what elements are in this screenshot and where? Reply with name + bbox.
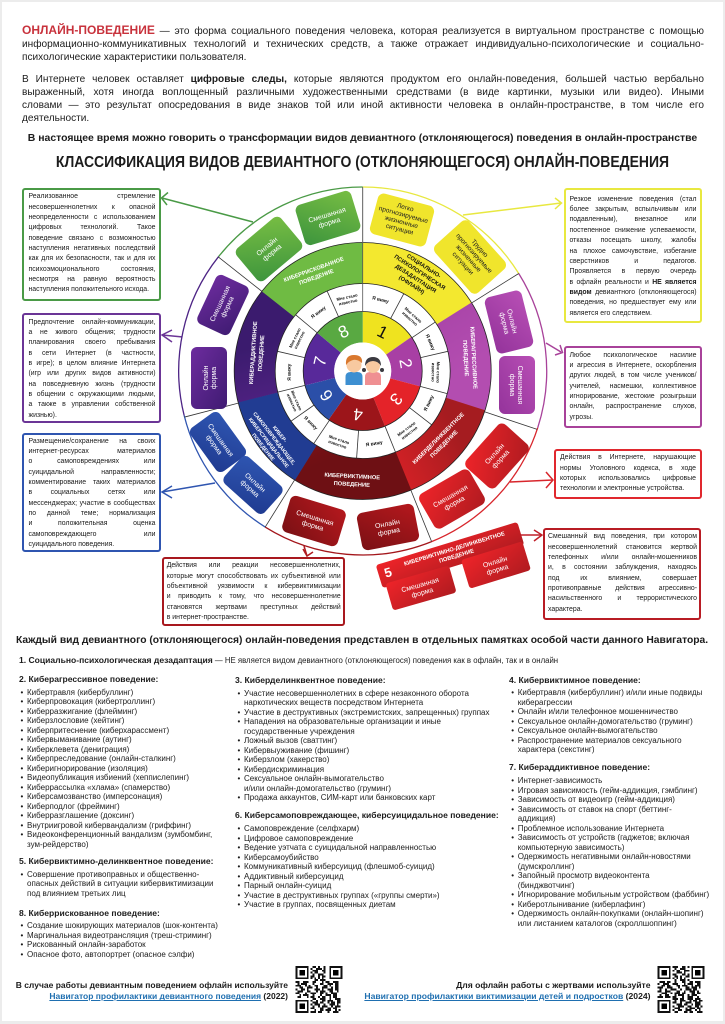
band label: sector 6: САМОПОВРЕЖДАЮЩЕЕ, [251, 411, 297, 467]
sector numbers: 4 [352, 404, 364, 424]
card: sector 8 online form: Онлайн [255, 236, 279, 258]
subtitle: В настоящее время можно говорить о трансформации видов девиантного (отклоняющегося) поведения в онлайн-пространстве [28, 133, 697, 144]
card: hard to predict situations: Трудно [470, 238, 489, 259]
inner white ring labels: известно [400, 425, 419, 441]
panel: victim-delinquent description: насильственного и террористического [548, 595, 697, 602]
panel: victim-delinquent description: характера. [548, 606, 582, 613]
inner white ring labels: Я вижу [310, 305, 328, 320]
band label: sector 1: ДЕЗАДАПТАЦИЯ [394, 264, 437, 295]
inner white ring labels: Мне стало [436, 362, 441, 383]
card: sector 5 mixed form: Смешанная [401, 577, 440, 594]
card: sector 5 mixed form: форма [411, 587, 434, 600]
list: cyber aggression: Киберрассылка «хлама» (спамерство) [27, 782, 170, 792]
list: delinquent: Кибердискриминация [244, 764, 324, 774]
list: cyber aggression: зум-рейдерство) [27, 840, 89, 848]
inner white ring labels: Мне стало [290, 390, 303, 411]
band label: sector 7: КИБЕРАДДИКТИВНОЕ [249, 321, 259, 384]
band label: sector 7: ПОВЕДЕНИЕ [258, 335, 266, 372]
list: self-harm: Участие в группах, посвященных диетам [244, 900, 396, 909]
inner white ring labels: известно [293, 330, 306, 350]
card: sector 2 online form: Онлайн [505, 308, 519, 335]
panel: socio-psychological maladjustment description: Проявляется в первую очередь [570, 268, 696, 275]
arrow: banner to mixed behaviour box [520, 530, 542, 541]
card: sector 8 mixed form: Смешанная [308, 207, 347, 225]
list: delinquent: наркотических веществ посредством Интернета [244, 698, 423, 707]
footer note: right navigator [364, 980, 650, 1001]
sector numbers [310, 321, 416, 424]
card: sector 3 online form [463, 421, 531, 491]
card: sector 8 online form [233, 214, 305, 284]
list: cyber aggression: Киберподлог (фрейминг) [27, 802, 120, 810]
intro paragraph: online behaviour definition [22, 22, 704, 62]
panel: victim-delinquent description: и, в состоянии заблуждения, находясь [548, 564, 697, 571]
panel: cyber aggression description: Любое психологическое насилие [570, 352, 696, 358]
inner white ring labels [285, 292, 441, 450]
card: easily predictable situations: жизненные [384, 215, 419, 230]
card: sector 7 online form: Онлайн [202, 365, 210, 391]
QR code: left [296, 966, 342, 1013]
list: delinquent: Киберзлом (хакерство) [244, 755, 329, 764]
band label: sector 4: КИБЕРВИКТИМНОЕ [324, 473, 380, 481]
panel: addiction description: а не живого общения; трудности [28, 329, 156, 336]
list: self-harm: Киберсамоубийство [244, 852, 319, 862]
list: addiction: Игнорирование мобильным устройством (фаббинг) [518, 890, 709, 899]
card: sector 2 mixed form: Смешанная [516, 366, 523, 405]
card: sector 2 mixed form [499, 356, 535, 414]
intro paragraph: online behaviour definition: ОНЛАЙН-ПОВЕДЕНИЕ — это форма социального поведения человека, которая реализуется в виртуальном пространстве с помощью [22, 22, 704, 36]
panel: cyber victim description: Действия или реакции несовершеннолетних, [167, 562, 341, 569]
panel: cyber delinquent description [554, 449, 702, 499]
list: cyber aggression: Киберпритеснение (киберхарассмент) [27, 726, 169, 734]
panel: socio-psychological maladjustment description: видом девиантного (отклоняющегося) [570, 289, 696, 296]
list: self-harm: Ведение уэтчата с суицидальной направленностью [244, 843, 436, 852]
list: addiction [512, 776, 709, 928]
arrow: red to delinquent box [510, 472, 553, 488]
footer note: right navigator: Для офлайн работы с жертвами используйте [456, 980, 650, 990]
band label: sector 8: ПОВЕДЕНИЕ [299, 269, 335, 287]
list: addiction: Запойный просмотр видеоконтента [518, 871, 650, 880]
inner white ring labels: Я вижу [371, 295, 390, 305]
inner white ring labels: Я вижу [302, 415, 319, 432]
intro paragraph: online behaviour definition: информационно-коммуникативных технологий и технических средств, а также отражает индивидуально-психологические и социально- [22, 38, 704, 50]
list: cyber aggression: Внутриигровой кибервандализм (гриффинг) [27, 820, 191, 830]
footer note: left navigator: Навигатор профилактики девиантного поведения (2022) [49, 991, 288, 1001]
panel: socio-psychological maladjustment description: является его следствием. [570, 310, 652, 317]
band label: sector 3: ПОВЕДЕНИЕ [430, 429, 460, 459]
list: delinquent [238, 688, 490, 802]
list: addiction: Зависимость от устройств (гаджетов; включая [518, 833, 689, 842]
panel: self-harm description: комментирование таких материалов [28, 479, 156, 486]
list: self-harm [238, 824, 440, 909]
inner white ring labels: Я вижу [365, 440, 383, 448]
card: sector 3 mixed form: форма [443, 495, 466, 512]
panel: self-harm description: о самоповреждениях или [28, 458, 156, 465]
list: self-harm: Участие в деструктивных группах («группы смерти») [244, 890, 440, 900]
sector numbers: 2 [395, 357, 416, 370]
list: self-harm: Цифровое самоповреждение [244, 834, 353, 842]
wheel geometry: rings and sectors [104, 112, 621, 630]
panel: cyber victim description: становятся жертвами преступных действий [167, 604, 341, 611]
panel: addiction description: на повседневную жизнь (трудности [28, 381, 156, 388]
panel: addiction description: (игр или других видов активности) [28, 370, 156, 377]
panel: risk behaviour description [22, 188, 161, 301]
panel: cyber delinquent description: Действия в Интернете, нарушающие [560, 454, 696, 461]
panel: risk behaviour description: цифровых технологий. Такое [28, 224, 156, 231]
inner white ring labels: известно [431, 363, 436, 382]
intro paragraph: digital traces: выраженный, хотя иногда воплощенный различными художественными средствами (в виде картинки, музыки или видео). Иными [22, 87, 704, 98]
panel: socio-psychological maladjustment description: поведения, но предшествует ему или [570, 299, 696, 306]
list: delinquent: Участие в деструктивных (экстремистских, запрещенных) группах [244, 708, 490, 716]
panel: risk behaviour description: несмотря на равную вероятность [28, 276, 156, 283]
card: easily predictable situations: прогнозируемые [378, 205, 429, 225]
sector numbers: 1 [374, 322, 391, 343]
list: cyber aggression: Видеопубликация избиений (хеппислепинг) [27, 773, 189, 782]
heading: list 8: 8. Киберрискованное поведение: [19, 908, 160, 918]
card: sector 4 online form: Онлайн [374, 518, 401, 530]
card: sector 4 mixed form: форма [301, 520, 324, 533]
inner white ring labels: Мне стало [404, 306, 423, 324]
card: sector 6 mixed form: Смешанная [206, 423, 234, 458]
heading: list 2: 2. Киберагрессивное поведение: [19, 674, 158, 684]
inner white ring labels: Мне стало [336, 292, 358, 302]
panel: victim-delinquent description: Смешанный вид поведения, при котором [548, 533, 697, 540]
band label: sector 6: КИБЕРСУИЦИДАЛЬНОЕ [247, 417, 290, 470]
inner white ring labels: Мне стало [288, 327, 302, 349]
panel: risk behaviour description: несовершеннолетних к опасной [28, 204, 156, 211]
footer note: left navigator: В случае работы девиантным поведением офлайн используйте [16, 980, 288, 990]
card: sector 6 mixed form [188, 410, 248, 474]
panel: cyber aggression description: других людей, в том числе учеников/ [570, 372, 696, 379]
intro paragraph: digital traces [22, 74, 704, 124]
panel: victim-delinquent description: телефонных и/или онлайн-мошенников [548, 554, 697, 561]
list: risk: Рискованный онлайн-заработок [27, 940, 146, 949]
arrow: blue to self-harm box [162, 483, 215, 498]
list: delinquent: Ложный вызов (сваттинг) [244, 736, 337, 745]
list: victim: Онлайн и/или телефонное мошенничество [518, 707, 678, 716]
band label: sector 6: КИБЕР- [271, 425, 288, 444]
list: delinquent: Сексуальное онлайн-вымогательство [244, 774, 384, 783]
panel: self-harm description: и положительная оценка [28, 520, 156, 527]
sector numbers: 7 [310, 354, 331, 368]
panel: socio-psychological maladjustment description: отказы посещать школу, жалобы [570, 237, 696, 244]
sector numbers: 8 [335, 321, 352, 343]
panel: self-harm description: мессенджерах; участие в сообществах [28, 500, 156, 507]
card: sector 6 online form: Онлайн [243, 471, 267, 494]
banner: sector 5 cyber-victim-delinquent: КИБЕРВИКТИМНО-ДЕЛИНКВЕНТНОЕ [403, 531, 506, 568]
list: delinquent: и/или онлайн-домогательство (груминг) [244, 784, 391, 792]
note: item 1: 1. Социально-психологическая дезадаптация — НЕ является видом девиантного (отклоняющегося) поведения как в офлайн, так и в онлайн [19, 655, 558, 665]
list: addiction: аддикция) [518, 814, 556, 823]
card: sector 8 mixed form: форма [318, 217, 341, 230]
arrow: magenta to aggression box [546, 343, 562, 355]
list: risk: Создание шокирующих материалов (шок-контента) [27, 921, 218, 930]
arrow: victim to bottom box [303, 546, 313, 556]
icon: children [346, 355, 384, 385]
panel: self-harm description: суицидальной направленности; [28, 469, 156, 476]
inner white ring labels: известно [338, 298, 358, 306]
list: victim [512, 688, 702, 754]
panel: socio-psychological maladjustment description [564, 188, 702, 323]
panel: cyber delinquent description: технологии и электронные устройства. [560, 485, 684, 492]
list: addiction: Проблемное использование Интернета [518, 824, 664, 833]
panel: self-harm description: суицидального поведения. [28, 541, 114, 548]
panel: victim-delinquent description: противоправные действия агрессивно- [548, 585, 697, 592]
panel: socio-psychological maladjustment description: подавленным), внезапное или [570, 216, 696, 223]
list: victim: характера (секстинг) [518, 745, 595, 754]
inner white ring labels: известно [328, 439, 348, 450]
arrow: yellow to maladjustment box [463, 198, 562, 215]
band label: sector 6: ПОВЕДЕНИЕ [250, 433, 276, 463]
panel: addiction description: в общении с окружающими людьми, [28, 391, 156, 398]
card: sector 7 online form: форма [211, 367, 218, 389]
card: sector 7 mixed form [195, 273, 251, 337]
band label: sector 1: СОЦИАЛЬНО- [405, 253, 442, 280]
list: delinquent: Продажа аккаунтов, СИМ-карт или банковских карт [244, 793, 435, 802]
intro paragraph: online behaviour definition: психологические характеристики пользователя. [22, 52, 246, 62]
list: delinquent: Кибервыуживание (фишинг) [244, 746, 349, 754]
section heading: memos: Каждый вид девиантного (отклоняющегося) онлайн-поведения представлен в отдельных памятках особой части данного Навигатора. [16, 635, 708, 646]
list: cyber aggression: Кибертравля (кибербуллинг) [27, 688, 133, 696]
card: sector 2 online form [484, 289, 534, 355]
panel: cyber aggression description [564, 346, 702, 428]
list: cyber aggression: Киберигнорирование (изоляция) [27, 764, 148, 772]
panel: addiction description: а также в управлении собственной [28, 401, 156, 408]
panel: risk behaviour description: психоэмоционального состояния, [28, 266, 156, 273]
list: addiction: Одержимость негативными онлайн-новостями [518, 852, 691, 861]
list: victim: Кибертравля (кибербуллинг) и/или иные подвиды [518, 688, 702, 697]
panel: addiction description: Предпочтение онлайн-коммуникации, [28, 319, 156, 326]
band label: sector 2: ПОВЕДЕНИЕ [461, 340, 469, 377]
heading: list 4: 4. Кибервиктимное поведение: [509, 675, 641, 685]
card: sector 3 online form: форма [491, 449, 511, 470]
card: sector 8 mixed form [294, 189, 362, 247]
panel: self-harm description: в социальных сетях или [28, 489, 156, 496]
list: addiction: Зависимость от видеоигр (гейм-аддикция) [518, 795, 675, 804]
panel: addiction description: в сети Интернет (в частности, [28, 350, 156, 357]
panel: addiction description: жизнью). [28, 412, 57, 419]
panel: addiction description [22, 313, 161, 423]
panel: self-harm description: Размещение/сохранение на своих [28, 438, 156, 444]
list: cyber aggression: Киберпреследование (онлайн-сталкинг) [27, 754, 176, 763]
heading: list 7: 7. Кибераддиктивное поведение: [509, 762, 650, 772]
panel: cyber aggression description: игнорирование, жестокие розыгрыши [570, 393, 696, 400]
card: sector 4 online form [356, 503, 420, 551]
card: sector 6 mixed form: форма [204, 434, 223, 456]
list: cyber aggression: Киберпровокация (кибертроллинг) [27, 697, 155, 706]
card: sector 2 mixed form: форма [508, 374, 515, 396]
panel: cyber victim description: которые могут способствовать их субъективной или [167, 573, 341, 580]
list: victim-delinquent [20, 870, 213, 898]
panel: risk behaviour description: поведение связано с возможностью [28, 235, 156, 242]
card: sector 4 online form: форма [377, 527, 401, 538]
band label: sector 2: КИБЕРАГРЕССИВНОЕ [468, 327, 478, 389]
list: self-harm: Самоповреждение (селфхарм) [244, 824, 359, 833]
list: self-harm: Парный онлайн-суицид [244, 881, 331, 890]
list: delinquent: Участие несовершеннолетних в сфере незаконного оборота [244, 688, 469, 698]
card: sector 5 mixed form [385, 565, 457, 611]
panel: socio-psychological maladjustment description: сверстников и педагогов. [570, 258, 696, 265]
card: sector 4 mixed form: Смешанная [295, 510, 334, 528]
intro paragraph: digital traces: деятельности. [22, 113, 89, 124]
banner: sector 5 cyber-victim-delinquent: 5 [382, 564, 394, 581]
list: addiction: Игровая зависимость (гейм-аддикция, гэмблинг) [518, 786, 698, 795]
list: victim-delinquent: опасных действий в ситуации кибервиктимизации [27, 879, 213, 888]
list: risk: Опасное фото, автопортрет (опасное сэлфи) [27, 950, 194, 959]
list: addiction: (бинджвотчинг) [518, 881, 575, 890]
panel: cyber aggression description: онлайн, распространение слухов, [570, 403, 696, 410]
band label: sector 4: ПОВЕДЕНИЕ [333, 481, 370, 489]
panel: cyber victim description: объективной уязвимости к кибервиктимизации [167, 583, 341, 590]
panel: self-harm description: интернет-ресурсах материалов [28, 448, 156, 455]
list: cyber aggression: Видеоконференционный вандализм (зумбомбинг, [27, 830, 212, 839]
card: sector 5 online form: форма [486, 564, 509, 577]
card: sector 2 online form: форма [498, 312, 510, 335]
card: easily predictable situations: Легко [396, 202, 415, 214]
list: addiction: или листанием каталогов (скроллшоппинг) [518, 919, 677, 928]
panel: cyber delinquent description: которых использовались цифровые [560, 475, 696, 482]
panel: cyber aggression description: угрозы. [570, 414, 593, 421]
list: risk [20, 921, 218, 959]
panel: self-harm description [22, 432, 161, 552]
panel: self-harm description: самоповреждающего или [28, 531, 156, 538]
list: delinquent: Нападения на образовательные организации и иные [244, 717, 441, 726]
card: sector 4 mixed form [281, 494, 347, 548]
list: cyber aggression: Киберразглашение (доксинг) [27, 811, 134, 820]
inner white ring labels: известно [286, 393, 298, 413]
panel: socio-psychological maladjustment description: более закрытым, вспыльчивым или [570, 206, 696, 213]
intro paragraph: digital traces: словами — это результат опосредования в виде знаков той или иной активности человека в онлайн-пространстве, в том числе его [22, 100, 704, 111]
panel: cyber victim description: и приводить к тому, что несовершеннолетние [167, 593, 341, 600]
card: hard to predict situations: прогнозируемые [454, 232, 493, 275]
sector numbers: 6 [316, 386, 337, 405]
inner white ring labels: Я вижу [287, 363, 293, 381]
card: sector 5 online form: Онлайн [482, 555, 508, 570]
panel: cyber delinquent description: нормы Уголовного кодекса, в ходе [560, 465, 696, 472]
panel: victim-delinquent description: под их влиянием, совершает [548, 575, 697, 582]
panel: socio-psychological maladjustment description: постепенное снижение успеваемости, [570, 227, 696, 234]
list: cyber aggression: Киберсамозванство (имперсонация) [27, 792, 162, 801]
panel: cyber victim description [162, 557, 345, 626]
card: sector 5 online form [461, 541, 531, 589]
card: sector 7 mixed form: форма [220, 296, 236, 319]
panel: risk behaviour description: как для их безопасности, так и для их [28, 255, 156, 262]
inner white ring labels: известно [401, 310, 419, 327]
panel: risk behaviour description: наступления негативных последствий [28, 245, 156, 252]
arrow: purple to addiction box [162, 330, 183, 342]
list: addiction: Одержимость онлайн-покупками (онлайн-шопинг) [518, 909, 704, 918]
panel: victim-delinquent description [542, 528, 701, 620]
list: self-harm: Аддиктивный киберсуицид [244, 872, 344, 880]
list: victim: Сексуальное онлайн-домогательство (груминг) [518, 716, 693, 726]
inner white ring labels: Я вижу [424, 333, 436, 352]
list: victim: Распространение материалов сексуального [518, 736, 682, 744]
band label: sector 1: (ОФЛАЙН) [397, 273, 426, 296]
list: cyber aggression: Кибервыманивание (аутинг) [27, 735, 132, 744]
list: addiction: (думскроллинг) [518, 862, 574, 871]
list: addiction: Интернет-зависимость [518, 776, 602, 785]
list: victim: Сексуальное онлайн-вымогательство [518, 726, 658, 735]
band label: sector 1: ПСИХОЛОГИЧЕСКАЯ [393, 254, 446, 292]
list: cyber aggression: Киберразжигание (флейминг) [27, 706, 137, 716]
panel: cyber victim description: в интернет-пространстве. [167, 614, 249, 621]
list: risk: Маргинальная видеотрансляция (треш-стриминг) [27, 931, 212, 940]
heading: list 6: 6. Киберсамоповреждающее, киберсуицидальное поведение: [235, 810, 499, 820]
panel: self-harm description: по данной теме; нормализация [28, 510, 156, 517]
banner: sector 5 cyber-victim-delinquent [376, 522, 524, 588]
list: victim-delinquent: под влиянием третьих лиц [27, 888, 126, 898]
list: addiction: компьютерную зависимость) [518, 843, 624, 852]
panel: risk behaviour description: неопределенности с использованием [28, 214, 156, 221]
card: sector 3 online form: Онлайн [483, 442, 506, 466]
card: hard to predict situations: ситуации [451, 251, 475, 277]
card: sector 6 online form [221, 454, 285, 516]
panel: addiction description: в игре); в целом влияние Интернета [28, 360, 156, 367]
panel: addiction description: планирования своего пребывания [28, 339, 156, 346]
panel: victim-delinquent description: несовершеннолетний становится жертвой [548, 544, 697, 551]
list: self-harm: Коммуникативный киберсуицид (флешмоб-суицид) [244, 862, 435, 871]
panel: cyber aggression description: и агрессия в Интернете, оскорбления [570, 362, 696, 369]
panel: cyber aggression description: учителей, насмешки, коллективное [570, 383, 696, 390]
inner white ring labels: Мне стало [396, 420, 416, 437]
arrow: green to risk box [162, 192, 253, 222]
card: sector 7 online form [191, 347, 227, 409]
inner white ring labels: Я вижу [423, 394, 436, 412]
heading: list 5: 5. Кибервиктимно-делинквентное поведение: [19, 856, 214, 866]
list: delinquent: государственные учреждения [244, 726, 355, 736]
band label: sector 8: КИБЕРРИСКОВАННОЕ [283, 256, 345, 284]
card: sector 7 mixed form: Смешанная [209, 285, 232, 323]
panel: socio-psychological maladjustment description: в офлайн реальности и НЕ является [570, 279, 696, 286]
panel: socio-psychological maladjustment description: Резкое изменение поведения (стал [570, 196, 696, 203]
card: sector 8 online form: форма [262, 243, 283, 263]
intro paragraph: digital traces: В Интернете человек оставляет цифровые следы, которые являются продуктом его онлайн-поведения, большей частью вербально [22, 74, 704, 85]
card: sector 6 online form: форма [239, 479, 260, 499]
list: addiction: Зависимость от ставок на спорт (беттинг- [518, 805, 672, 814]
panel: socio-psychological maladjustment description: на плохое самочувствие, избегание [570, 248, 696, 255]
inner white ring labels: Мне стало [328, 434, 350, 445]
footer note: left navigator [16, 980, 288, 1001]
QR code: right [658, 966, 704, 1013]
banner: sector 5 cyber-victim-delinquent: ПОВЕДЕНИЕ [439, 548, 475, 565]
panel: risk behaviour description: наступления положительного исхода. [28, 286, 149, 293]
panel: risk behaviour description: Реализованное стремление [28, 193, 156, 200]
card: hard to predict situations [431, 218, 509, 296]
list: cyber aggression [20, 688, 212, 848]
card: easily predictable situations: ситуации [385, 223, 414, 237]
footer note: right navigator: Навигатор профилактики виктимизации детей и подростков (2024) [364, 991, 650, 1001]
list: addiction: Киберотлынивание (киберлафинг) [518, 900, 645, 909]
card: hard to predict situations: жизненные [454, 244, 482, 274]
sector numbers: 3 [386, 389, 406, 409]
list: cyber aggression: Киберклевета (дениграция) [27, 744, 129, 754]
card: sector 3 mixed form [417, 467, 487, 531]
heading: list 3: 3. Киберделинквентное поведение: [235, 675, 386, 685]
list: victim-delinquent: Совершение противоправных и общественно- [27, 870, 199, 878]
card: easily predictable situations [369, 192, 435, 248]
card: sector 3 mixed form: Смешанная [432, 484, 469, 510]
band label: sector 3: КИБЕРДЕЛИНКВЕНТНОЕ [412, 412, 466, 466]
main title: КЛАССИФИКАЦИЯ ВИДОВ ДЕВИАНТНОГО (ОТКЛОНЯЮЩЕГОСЯ) ОНЛАЙН-ПОВЕДЕНИЯ [56, 154, 669, 170]
list: victim: киберагрессии [518, 698, 572, 706]
list: cyber aggression: Киберзлословие (хейтинг) [27, 716, 124, 725]
